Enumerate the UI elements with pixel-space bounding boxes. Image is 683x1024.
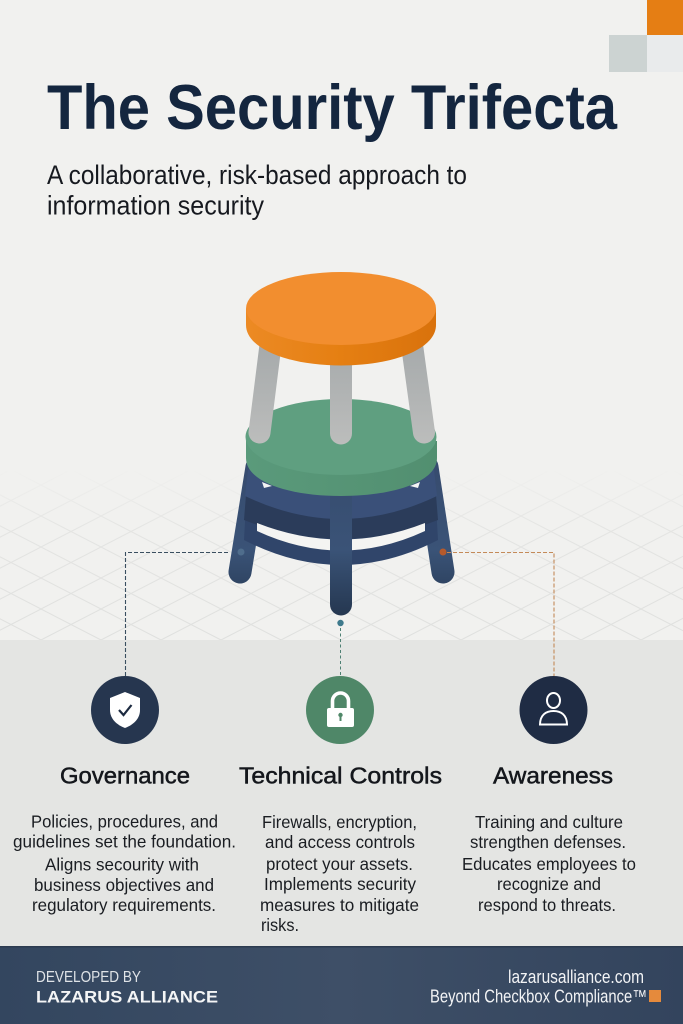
text: awareness description: strengthen defenses. <box>470 832 626 852</box>
text: awareness description: respond to threats. <box>478 895 616 915</box>
footer: developer credit: LAZARUS ALLIANCE <box>36 988 218 1006</box>
connector: technical controls <box>337 620 344 676</box>
text: technical controls description: protect your assets. <box>266 854 413 874</box>
text: technical controls description: risks. <box>261 915 299 935</box>
icon: technical controls lock <box>306 676 374 744</box>
floor grid <box>0 505 683 640</box>
text: governance description: regulatory requirements. <box>32 895 216 915</box>
footer: developer credit <box>36 969 218 1006</box>
stool: gray legs <box>260 345 424 434</box>
text: technical controls description: and access controls <box>265 832 415 852</box>
stool: green shelf <box>246 399 437 496</box>
subtitle: information security <box>47 190 265 220</box>
text: technical controls description: Implements security <box>264 874 416 894</box>
icon: awareness person <box>520 676 588 744</box>
footer: website and tagline: lazarusalliance.com <box>508 967 644 987</box>
text: governance description: guidelines set the foundation. <box>13 832 236 852</box>
icon: governance shield <box>91 676 159 744</box>
bottom panel <box>0 640 683 947</box>
text: governance description <box>13 812 236 915</box>
stool: navy base <box>240 467 443 616</box>
text: technical controls description <box>260 812 419 935</box>
footer bar <box>0 946 683 1024</box>
footer: website and tagline <box>430 967 661 1006</box>
title: The Security Trifecta <box>47 73 618 143</box>
text: awareness description: recognize and <box>497 874 601 894</box>
connector: governance <box>126 548 244 676</box>
connector: awareness <box>440 548 554 676</box>
text: awareness description: Training and culture <box>475 812 623 832</box>
text: awareness description <box>462 812 636 915</box>
corner accent squares <box>609 0 683 72</box>
text: awareness description: Educates employees to <box>462 854 636 874</box>
heading: awareness: Awareness <box>493 762 613 788</box>
text: governance description: Policies, procedures, and <box>31 812 218 832</box>
text: technical controls description: Firewalls, encryption, <box>262 812 417 832</box>
heading: governance: Governance <box>60 762 190 788</box>
heading: technical controls: Technical Controls <box>239 762 442 788</box>
text: governance description: Aligns secourity with <box>45 854 199 874</box>
text: technical controls description: measures to mitigate <box>260 895 419 915</box>
footer: developer credit: DEVELOPED BY <box>36 969 141 986</box>
stool: orange seat <box>246 272 436 366</box>
stool illustration <box>240 272 443 616</box>
subtitle: A collaborative, risk-based approach to <box>47 160 467 190</box>
subtitle <box>47 160 467 220</box>
text: governance description: business objectives and <box>34 875 214 895</box>
